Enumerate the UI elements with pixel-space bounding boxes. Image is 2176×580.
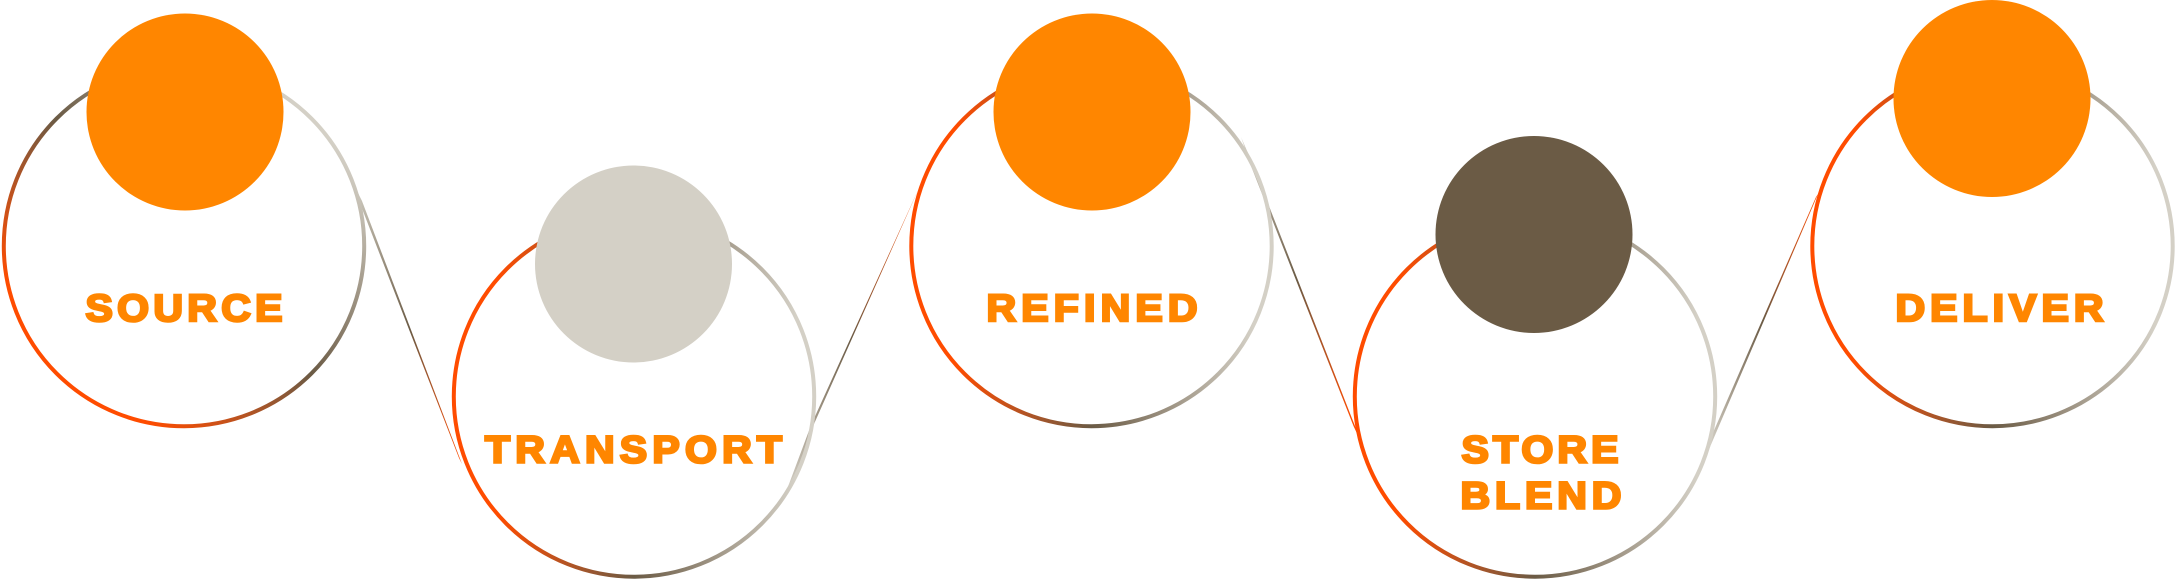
step: deliver (1812, 0, 2173, 426)
ring: refined (911, 66, 1272, 426)
node: refined (994, 14, 1190, 210)
label: source: SOURCE (86, 287, 282, 330)
label: transport: TRANSPORT (485, 429, 782, 471)
label: refined: REFINED (986, 287, 1198, 330)
connector: source to transport (358, 193, 462, 464)
ring: store blend (1355, 216, 1715, 577)
step: store blend (1355, 136, 1715, 577)
ring: deliver (1812, 66, 2173, 426)
ring: source (4, 66, 364, 426)
node: source (86, 14, 284, 210)
connector: store blend to deliver (1706, 194, 1818, 455)
ring: transport (454, 216, 814, 577)
label: store blend: STORE (1462, 429, 1619, 471)
label: store blend (1460, 429, 1621, 517)
step: refined (911, 14, 1272, 426)
step: source (4, 14, 364, 426)
step: transport (454, 166, 814, 577)
label: store blend: BLEND (1460, 475, 1621, 517)
connector: refined to store blend (1241, 137, 1366, 453)
node: deliver (1894, 0, 2090, 197)
label: deliver: DELIVER (1896, 287, 2104, 330)
node: transport (535, 166, 732, 362)
node: store blend (1436, 136, 1632, 333)
connector: transport to refined (786, 188, 919, 492)
